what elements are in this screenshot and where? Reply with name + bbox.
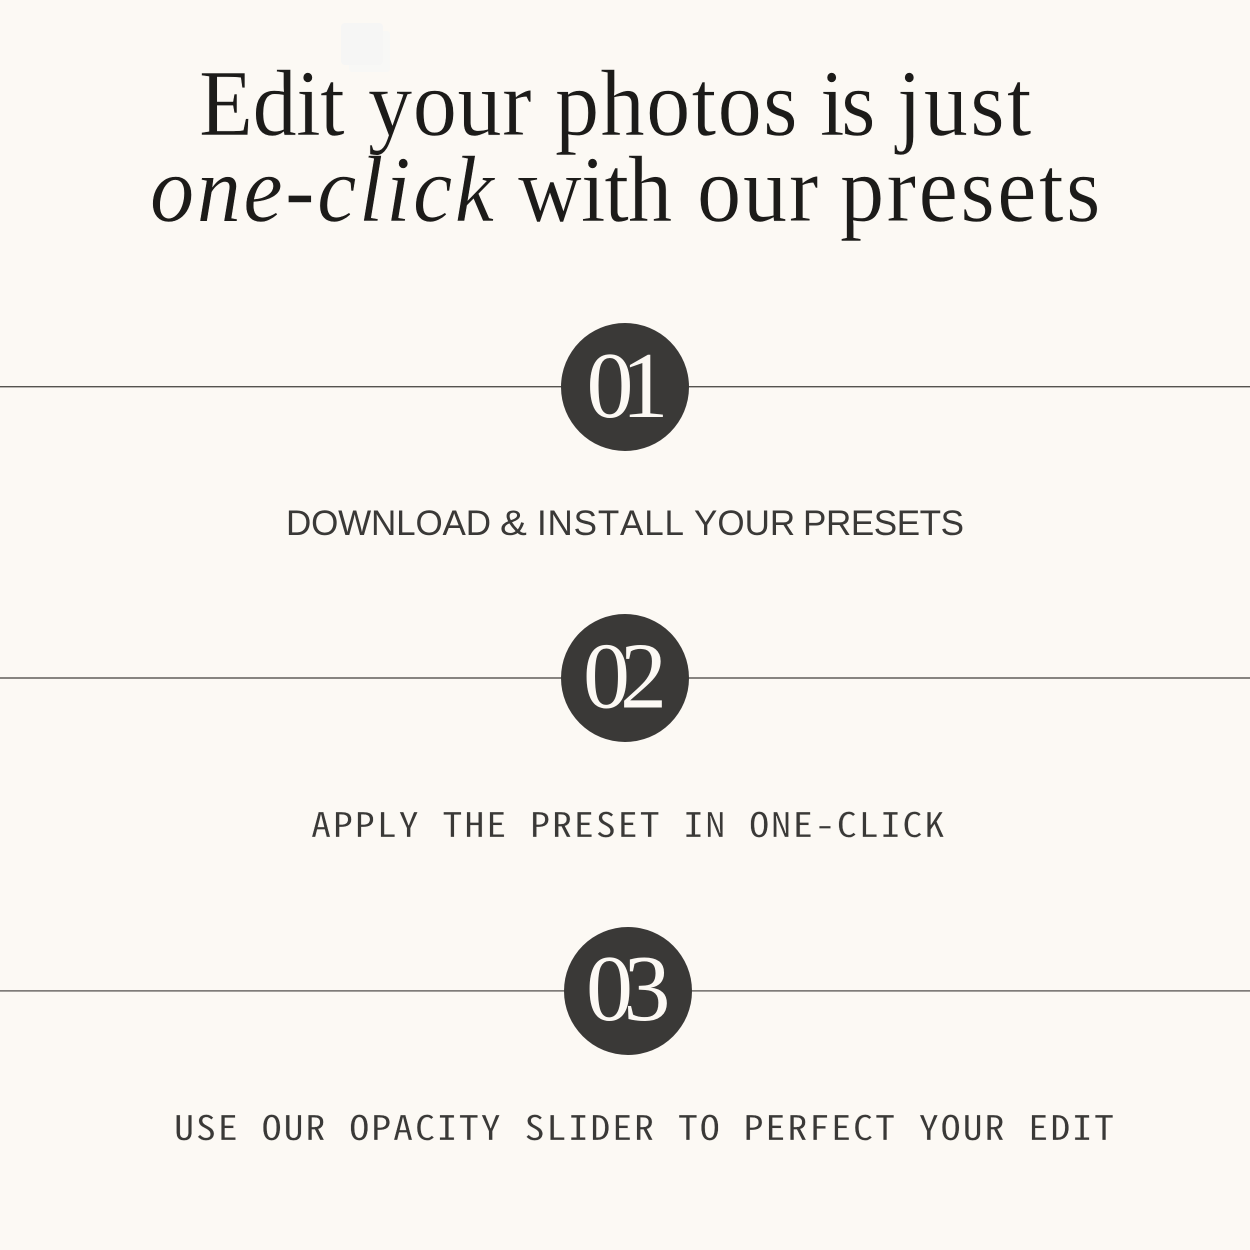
title: presets <box>840 138 1100 242</box>
title: just <box>894 52 1031 156</box>
title: is <box>820 52 875 156</box>
title: with <box>518 138 672 242</box>
title: your <box>368 52 532 156</box>
step 1 label: INSTALL <box>537 504 684 543</box>
step 3 badge: 03 <box>586 937 670 1041</box>
icon: faint copy squares <box>341 23 390 72</box>
title <box>150 52 1100 242</box>
step 1 badge: 01 <box>586 334 668 438</box>
step 2 <box>0 614 1250 847</box>
step 1 label <box>286 503 964 543</box>
step 2 badge: 02 <box>583 624 667 728</box>
step 3 badge <box>564 927 692 1055</box>
step 1 label: YOUR <box>694 504 795 543</box>
step 1 <box>0 323 1250 543</box>
step 2 badge <box>561 614 689 742</box>
title: our <box>697 138 818 242</box>
title: one-click <box>150 138 495 242</box>
step 3 label: USE OUR OPACITY SLIDER TO PERFECT YOUR EDIT <box>174 1101 1116 1150</box>
step 1 label: DOWNLOAD <box>286 504 491 543</box>
step 1 label: & <box>500 503 527 542</box>
step 1 badge <box>561 323 689 451</box>
step 3 <box>0 927 1250 1150</box>
title: photos <box>555 52 798 156</box>
step 1 label: PRESETS <box>803 504 964 543</box>
step 2 label: APPLY THE PRESET IN ONE-CLICK <box>311 798 946 847</box>
title: Edit <box>199 52 345 156</box>
